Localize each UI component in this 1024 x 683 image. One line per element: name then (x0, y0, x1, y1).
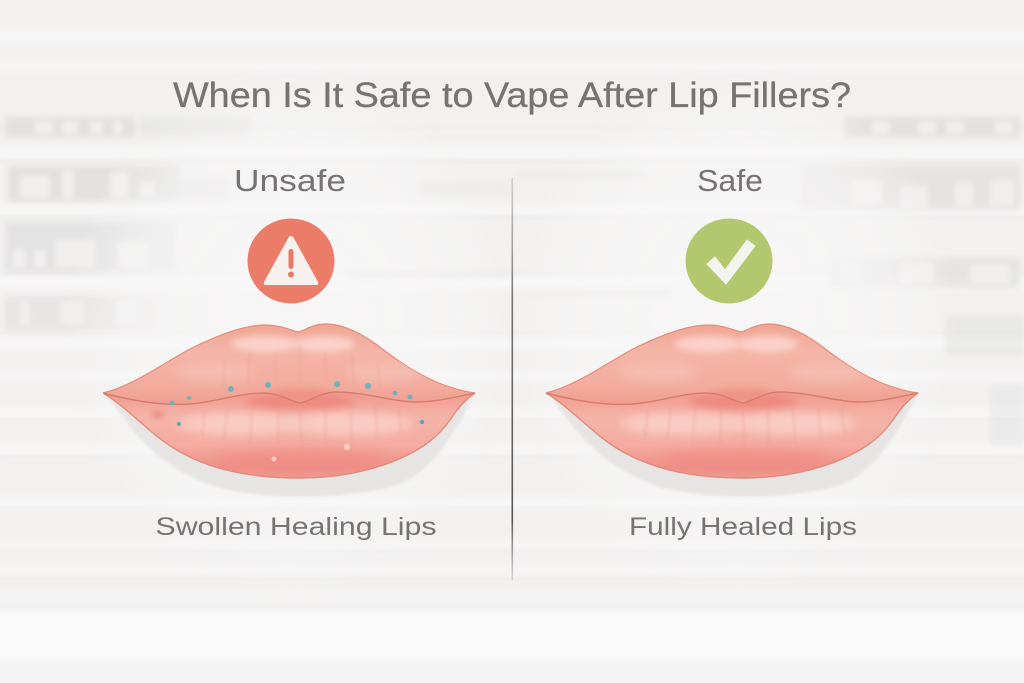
icon: warning (248, 218, 334, 304)
heading: Safe: Safe (697, 163, 763, 198)
icon: check (686, 218, 772, 304)
lips: swollen healing (103, 324, 475, 497)
caption: Swollen Healing Lips: Swollen Healing Lips (156, 513, 436, 541)
injection dots (170, 381, 424, 426)
lips: fully healed (546, 324, 918, 497)
title: When Is It Safe to Vape After Lip Fillers? (173, 76, 851, 115)
vertical divider (512, 178, 513, 580)
heading: Unsafe: Unsafe (234, 163, 346, 198)
caption: Fully Healed Lips: Fully Healed Lips (629, 513, 857, 541)
panel: unsafe (103, 163, 475, 541)
panel: safe (546, 163, 918, 541)
